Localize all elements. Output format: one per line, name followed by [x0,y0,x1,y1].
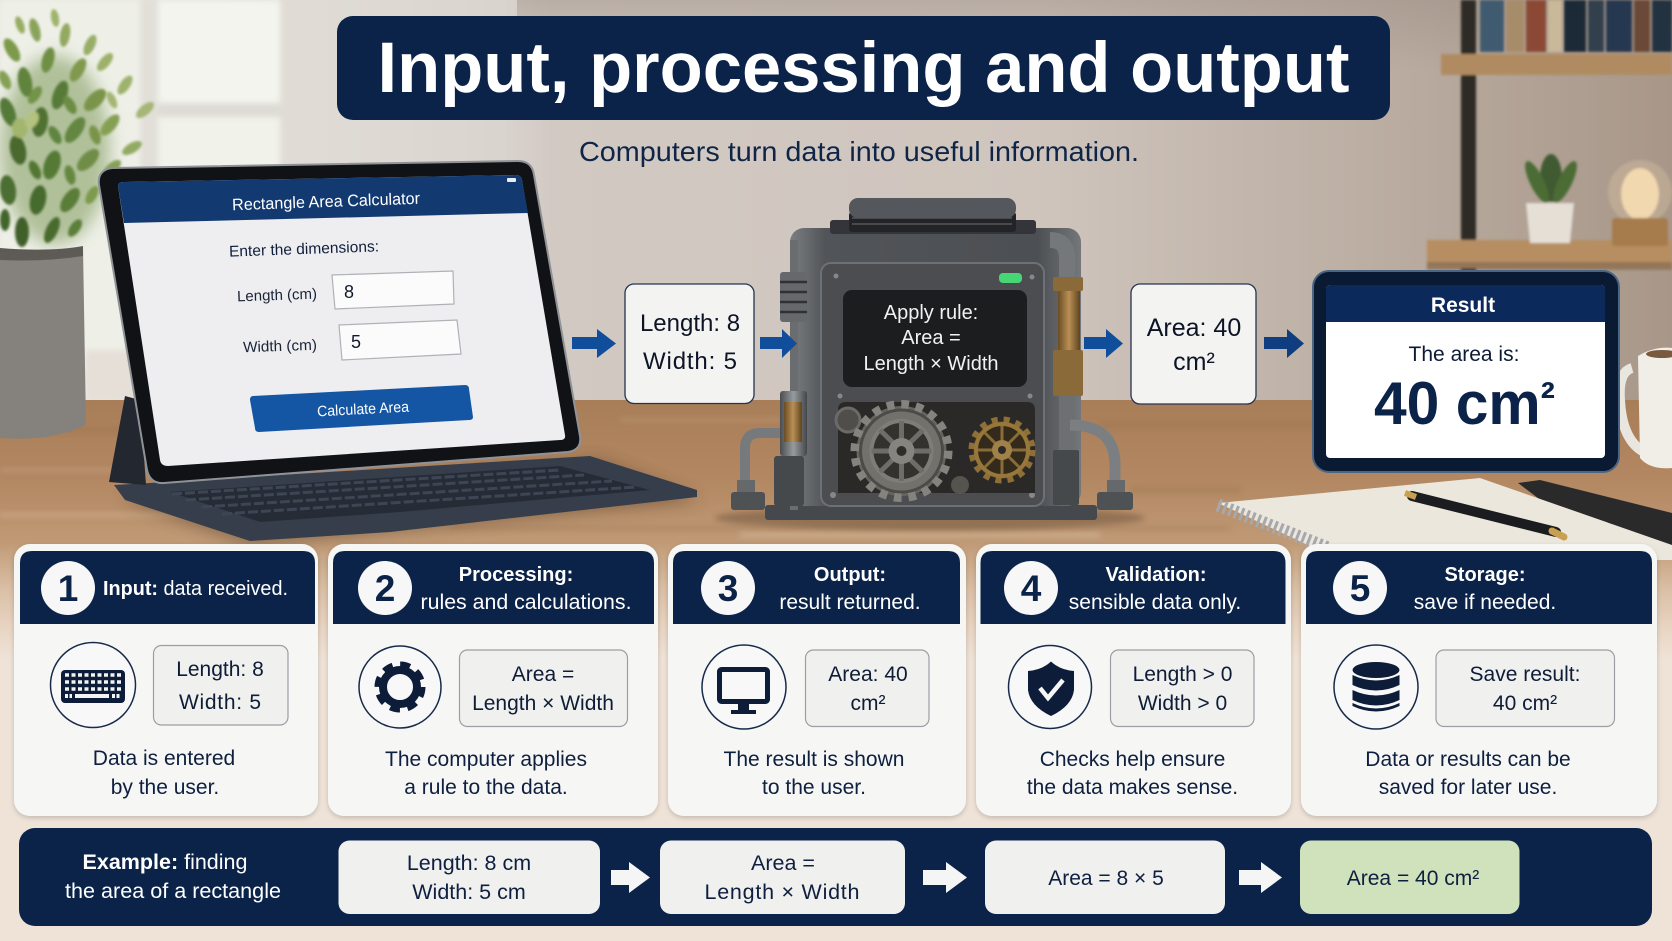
card 5 header: Storage: [1444,564,1526,586]
card 4 header [980,551,1286,624]
arrow [923,862,967,893]
card 1 values [154,646,288,725]
flow arrow 4 [1264,329,1304,358]
machine base [765,505,1097,520]
flow box: area value: cm² [1173,348,1215,376]
gear compartment [836,402,1035,496]
card 2 description [385,748,587,799]
example step 2 [660,840,905,914]
card 2 description: a rule to the data. [404,776,568,799]
machine screen: Apply rule: [884,302,978,324]
card 3 values: cm² [850,692,886,715]
tablet body [99,161,580,483]
small brass gear [973,421,1031,479]
example label: Example: finding [83,850,247,874]
card 5 values: 40 cm² [1493,692,1557,715]
flow box: area value [1131,284,1256,404]
card 3 header: 3 [718,568,738,609]
arrow [611,862,650,893]
card 2 header: Processing: [459,564,573,586]
card 3 values [806,650,929,726]
card 4 description [1027,748,1238,799]
result tablet: The area is: [1409,343,1519,366]
card 4 header: 4 [1021,568,1042,609]
card 1 header: Input: data received. [103,578,288,600]
arrow [1239,862,1282,893]
card 1 description: Data is entered [93,747,235,770]
example step 1: Length: 8 cm [407,851,531,875]
shelves, books, small plant and candle [1427,0,1672,290]
card 1 header: 1 [58,568,78,609]
calculate button [250,385,473,432]
flow arrow 2 [760,329,797,358]
result tablet [1313,271,1619,472]
card 3 header: result returned. [779,591,921,614]
flow box: input values [625,284,754,404]
card 1 values: Length: 8 [176,658,264,681]
card 2 values: Length × Width [472,692,614,715]
machine screen: Area = [901,327,961,349]
card 2 header [333,551,654,624]
icon: monitor [702,645,786,729]
card 3 description: to the user. [762,776,866,799]
example step 1 [338,840,600,914]
card 2 header: 2 [375,568,395,609]
example step 2: Area = [751,851,815,875]
width field [243,320,461,360]
flow arrow 1 [572,329,616,358]
card 1: input [14,544,318,816]
result tablet: Result [1431,294,1495,317]
width field: 5 [351,332,361,352]
card 4 values [1110,650,1254,726]
icon: database [1334,645,1418,729]
panel rivets [830,274,1035,498]
card 4 description: Checks help ensure [1040,748,1225,771]
card 5 header [1306,551,1652,624]
icon: keyboard [50,642,136,728]
icon: shield [1008,646,1092,728]
example step 3: Area = 8 × 5 [1048,867,1164,890]
card 3: output [668,544,966,816]
card 5 description: saved for later use. [1379,776,1557,799]
card 3 description [724,748,904,799]
example result [1300,840,1520,914]
card 5 values: Save result: [1470,663,1580,686]
card 2 values: Area = [512,663,574,686]
example step 1: Width: 5 cm [412,880,526,904]
example step 3 [985,840,1225,914]
screen title: Rectangle Area Calculator [232,190,421,214]
card 3 header: Output: [814,564,886,586]
large steel gear [856,406,946,496]
width field: Width (cm) [243,337,317,356]
calculate button: Calculate Area [317,399,410,420]
card 2 values [460,650,628,726]
card 1 description [93,747,235,799]
machine screen: Length × Width [863,353,999,375]
length field: Length (cm) [237,286,317,305]
card 2 description: The computer applies [385,748,587,771]
card 3 description: The result is shown [724,748,904,771]
length field [237,271,454,309]
notebook and pen [1218,478,1672,560]
example result: Area = 40 cm² [1347,867,1479,890]
card 4 header: Validation: [1105,564,1207,586]
keyboard [114,456,697,541]
card 5: storage [1301,544,1657,816]
tablet stand [109,396,146,485]
icon: gear [359,646,441,728]
card 4 description: the data makes sense. [1027,776,1238,799]
card 1 header [20,551,315,624]
processing machine [715,198,1145,530]
potted plant [0,8,157,439]
flow box: input values: Width: 5 [643,348,737,375]
card 5 description: Data or results can be [1365,748,1571,771]
card 1 description: by the user. [111,776,219,799]
coffee mug [1620,348,1672,468]
machine screen [843,290,1027,387]
flow box: input values: Length: 8 [640,310,740,337]
card 5 description [1365,748,1571,799]
card 2: processing [328,544,658,816]
card 1 values: Width: 5 [179,691,261,714]
face panel [821,263,1044,506]
example label: the area of a rectangle [65,879,281,903]
card 4 values: Width > 0 [1138,692,1227,715]
card 5 values [1436,650,1614,726]
card 3 values: Area: 40 [828,663,908,686]
left pipework [731,240,807,510]
flow arrow 3 [1084,329,1123,358]
result tablet: ² [1541,374,1555,423]
right pipework [1050,240,1133,510]
card 4 values: Length > 0 [1133,663,1232,686]
prompt: Enter the dimensions: [229,238,379,261]
example label [65,850,281,903]
card 4: validation [976,544,1291,816]
tablet screen [118,175,565,466]
card 5 header: save if needed. [1414,591,1556,614]
input tablet with keyboard [99,161,700,545]
card 2 header: rules and calculations. [420,591,632,614]
example step 2: Length × Width [704,880,860,904]
status light [999,273,1022,283]
result tablet: 40 cm [1374,370,1544,437]
top cap [830,198,1036,234]
example bar [19,828,1652,926]
card 3 header [673,551,960,624]
subtitle: Computers turn data into useful information. [579,136,1139,167]
title banner: Input, processing and output [378,29,1350,108]
flow box: area value: Area: 40 [1147,314,1241,342]
card 5 header: 5 [1350,568,1370,609]
length field: 8 [344,282,354,302]
machine body [790,228,1081,506]
card 4 header: sensible data only. [1069,591,1241,614]
